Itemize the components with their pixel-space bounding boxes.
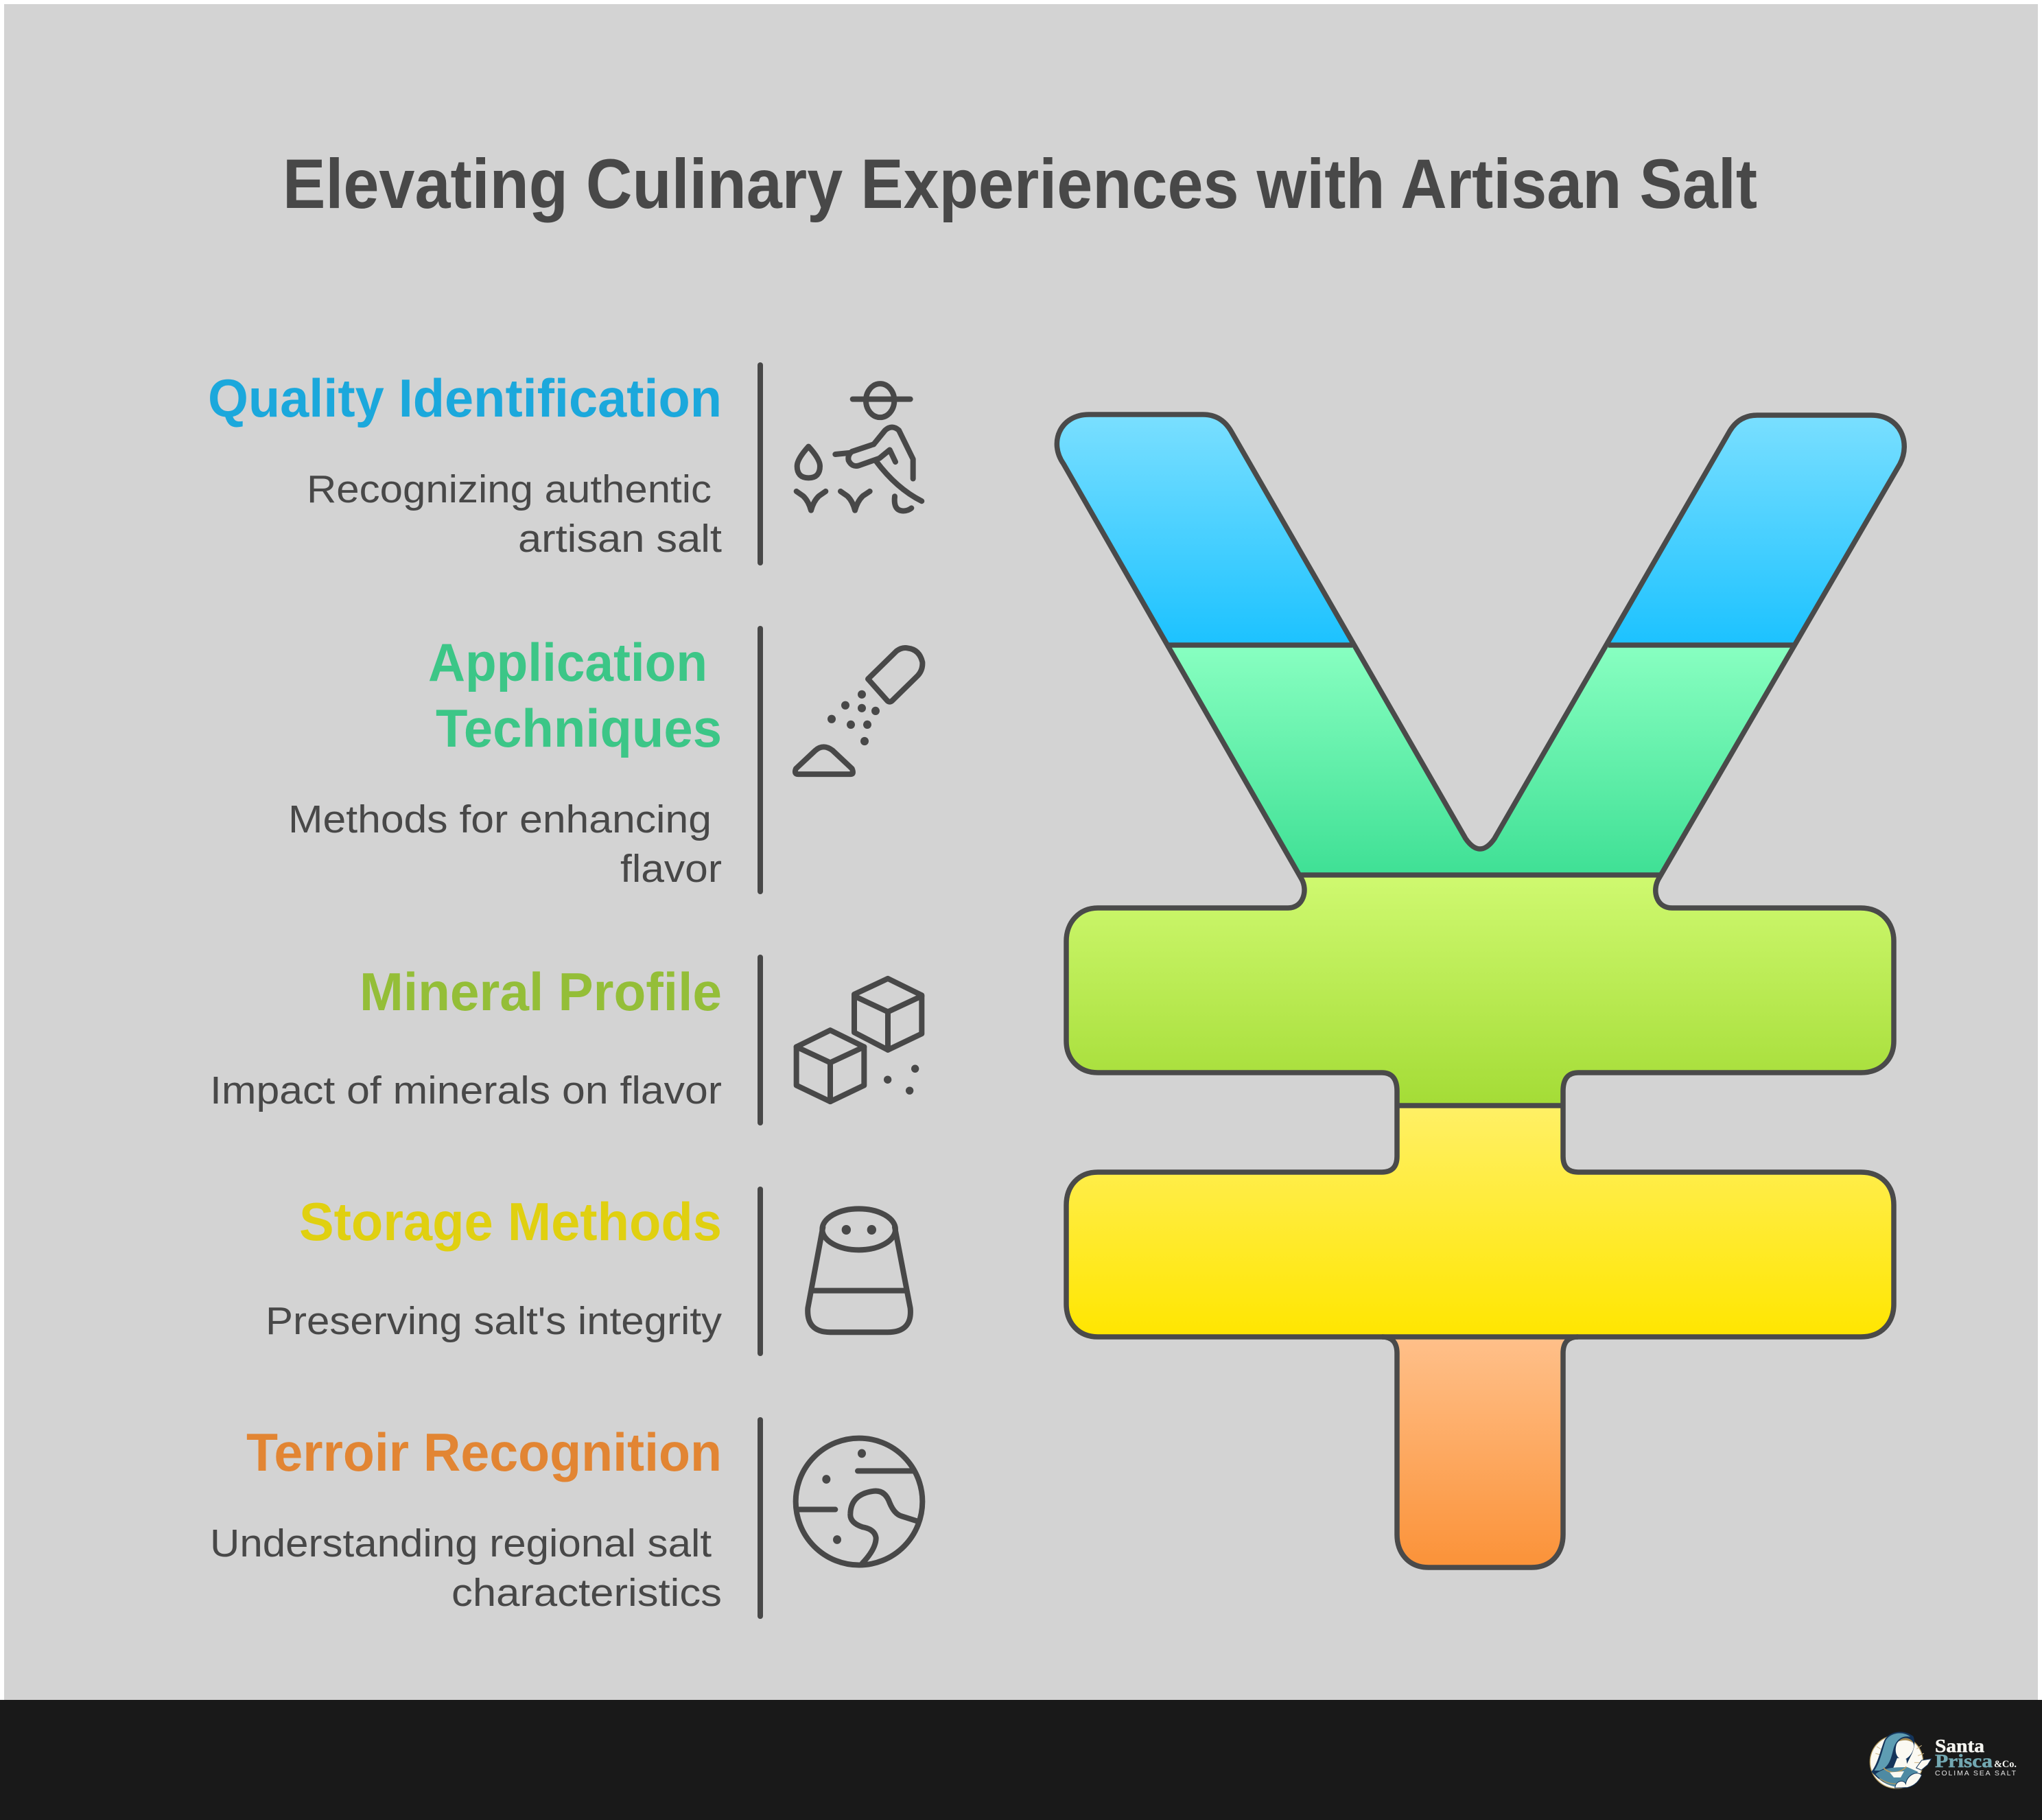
logo: Santa Prisca and Co.: [1870, 1731, 2017, 1788]
text block: Quality Identification: artisan salt: [518, 517, 722, 561]
text block: Terroir Recognition: characteristics: [451, 1571, 722, 1615]
text block: Storage Methods: [266, 1191, 723, 1343]
text block: Terroir Recognition: [210, 1422, 722, 1615]
text block: Application Techniques: Methods for enhancing: [288, 797, 712, 841]
band: Application Techniques (green): [1172, 646, 1790, 873]
logo wordmark: &Co.: [1994, 1759, 2017, 1770]
logo wordmark: Santa: [1935, 1736, 1985, 1756]
title: Elevating Culinary Experiences with Artisan Salt: [283, 145, 1757, 223]
text block: Quality Identification: [208, 368, 722, 561]
icon: salt farmer raking: [797, 384, 922, 511]
text block: Terroir Recognition: Terroir Recognition: [246, 1422, 722, 1482]
icon: salt jar: [808, 1209, 911, 1332]
text block: Application Techniques: flavor: [620, 847, 722, 891]
logo emblem: [1870, 1731, 1932, 1788]
yen symbol chart: [1057, 415, 1904, 1567]
text block: Application Techniques: [288, 632, 722, 891]
text block: Application Techniques: Techniques: [436, 698, 722, 758]
text block: Quality Identification: Quality Identification: [208, 368, 722, 428]
text block: Mineral Profile: Impact of minerals on flavor: [210, 1069, 722, 1112]
row dividers: [758, 365, 763, 1616]
text block: Application Techniques: Application: [428, 632, 707, 692]
icon: salt shaker with falling grains: [795, 648, 922, 774]
yen outline: [1057, 415, 1904, 1567]
footer bar: [0, 1700, 2042, 1820]
text block: Mineral Profile: Mineral Profile: [360, 961, 722, 1022]
band: Quality Identification (blue): [1059, 417, 1902, 642]
logo wordmark: [1935, 1736, 2017, 1777]
text block: Storage Methods: Storage Methods: [299, 1191, 722, 1252]
text block: Mineral Profile: [210, 961, 722, 1112]
text block: Storage Methods: Preserving salt's integrity: [266, 1299, 723, 1343]
band: Terroir Recognition (orange): [1396, 1340, 1564, 1565]
logo wordmark: COLIMA SEA SALT: [1935, 1769, 2017, 1777]
logo wordmark: Prisca: [1935, 1751, 1993, 1771]
band: Mineral Profile (lime): [1069, 877, 1891, 1104]
icon: mineral cubes: [797, 979, 922, 1101]
band: Storage Methods (yellow): [1069, 1108, 1891, 1334]
icon: terroir globe: [796, 1438, 922, 1565]
text block: Terroir Recognition: Understanding regional salt: [210, 1521, 712, 1565]
text block: Quality Identification: Recognizing authentic: [307, 467, 712, 511]
